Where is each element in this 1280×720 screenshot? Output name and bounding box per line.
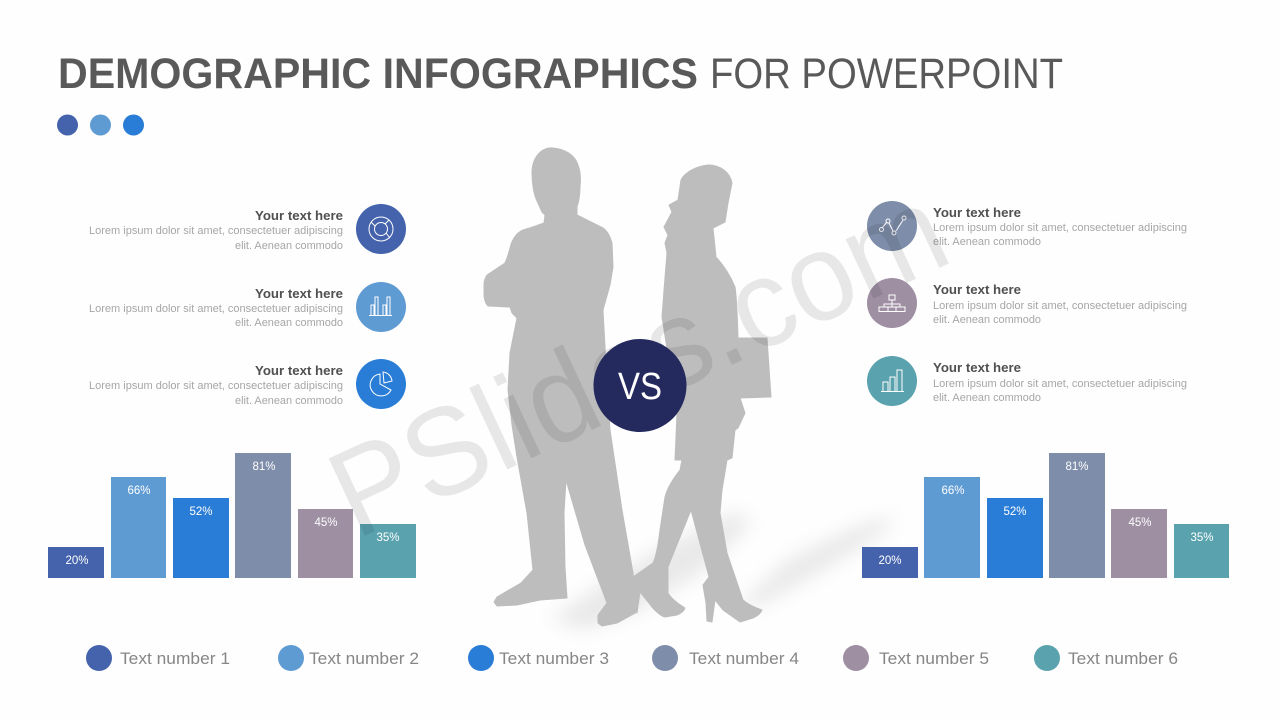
title: DEMOGRAPHIC INFOGRAPHICS bbox=[58, 50, 698, 98]
silhouette: woman with folder bbox=[633, 165, 771, 622]
right text row 1 bbox=[933, 205, 1187, 248]
left text row 3: elit. Aenean commodo bbox=[235, 395, 343, 407]
right text row 3: Your text here bbox=[933, 360, 1021, 375]
right text row 3: elit. Aenean commodo bbox=[933, 392, 1041, 404]
bar chart: right: 35% bbox=[1190, 532, 1214, 544]
bar chart: left: 45% bbox=[314, 517, 338, 529]
silhouette: man bbox=[484, 148, 637, 626]
left text row 2: Your text here bbox=[255, 286, 343, 301]
right text row 2 bbox=[933, 282, 1187, 326]
floor shadows bbox=[550, 512, 895, 630]
legend: Text number 3 bbox=[499, 649, 609, 668]
bar chart: left: 20% bbox=[65, 555, 89, 567]
bar chart: right: 20% bbox=[878, 555, 902, 567]
VS badge: VS bbox=[618, 366, 662, 408]
title bbox=[58, 50, 1063, 98]
watermark: PSlides.com bbox=[309, 160, 967, 564]
bar chart: left: 81% bbox=[252, 461, 276, 473]
left text row 3: Lorem ipsum dolor sit amet, consectetuer adipiscing bbox=[89, 380, 343, 392]
bar chart: right bbox=[862, 453, 1229, 578]
bar chart: left: 66% bbox=[127, 485, 151, 497]
icon: bar chart bbox=[356, 282, 406, 332]
left text row 2: elit. Aenean commodo bbox=[235, 317, 343, 329]
legend: Text number 5 bbox=[879, 649, 989, 668]
bar chart: right: 52% bbox=[1003, 506, 1027, 518]
left text row 1: elit. Aenean commodo bbox=[235, 240, 343, 252]
legend: Text number 4 bbox=[689, 649, 799, 668]
decorative header dots bbox=[57, 114, 144, 136]
right text row 2: Lorem ipsum dolor sit amet, consectetuer adipiscing bbox=[933, 300, 1187, 312]
legend: Text number 2 bbox=[309, 649, 419, 668]
left text row 1: Your text here bbox=[255, 208, 343, 223]
bar chart: right: 81% bbox=[1065, 461, 1089, 473]
legend: Text number 6 bbox=[1068, 649, 1178, 668]
right text row 2: elit. Aenean commodo bbox=[933, 314, 1041, 326]
right text row 1: Lorem ipsum dolor sit amet, consectetuer adipiscing bbox=[933, 222, 1187, 234]
right text row 2: Your text here bbox=[933, 282, 1021, 297]
left text row 2: Lorem ipsum dolor sit amet, consectetuer adipiscing bbox=[89, 303, 343, 315]
left text row 1 bbox=[89, 208, 343, 252]
icon: pie chart bbox=[356, 359, 406, 409]
icon: donut chart bbox=[356, 204, 406, 254]
right text row 3: Lorem ipsum dolor sit amet, consectetuer adipiscing bbox=[933, 378, 1187, 390]
bar chart: right: 45% bbox=[1128, 517, 1152, 529]
icon: line chart bbox=[867, 201, 917, 251]
right text row 1: Your text here bbox=[933, 205, 1021, 220]
left text row 3: Your text here bbox=[255, 363, 343, 378]
left text row 3 bbox=[89, 363, 343, 407]
bar chart: left: 52% bbox=[189, 506, 213, 518]
legend: Text number 1 bbox=[120, 649, 230, 668]
left text row 2 bbox=[89, 286, 343, 329]
VS badge bbox=[594, 339, 686, 432]
bar chart: right: 66% bbox=[941, 485, 965, 497]
title: FOR POWERPOINT bbox=[710, 50, 1063, 98]
right text row 1: elit. Aenean commodo bbox=[933, 236, 1041, 248]
bar chart: left bbox=[48, 453, 416, 578]
right text row 3 bbox=[933, 360, 1187, 404]
left text row 1: Lorem ipsum dolor sit amet, consectetuer adipiscing bbox=[89, 225, 343, 237]
bar chart: left: 35% bbox=[376, 532, 400, 544]
icon: rising bars bbox=[867, 356, 917, 406]
icon: org chart bbox=[867, 278, 917, 328]
legend bbox=[86, 645, 1178, 671]
